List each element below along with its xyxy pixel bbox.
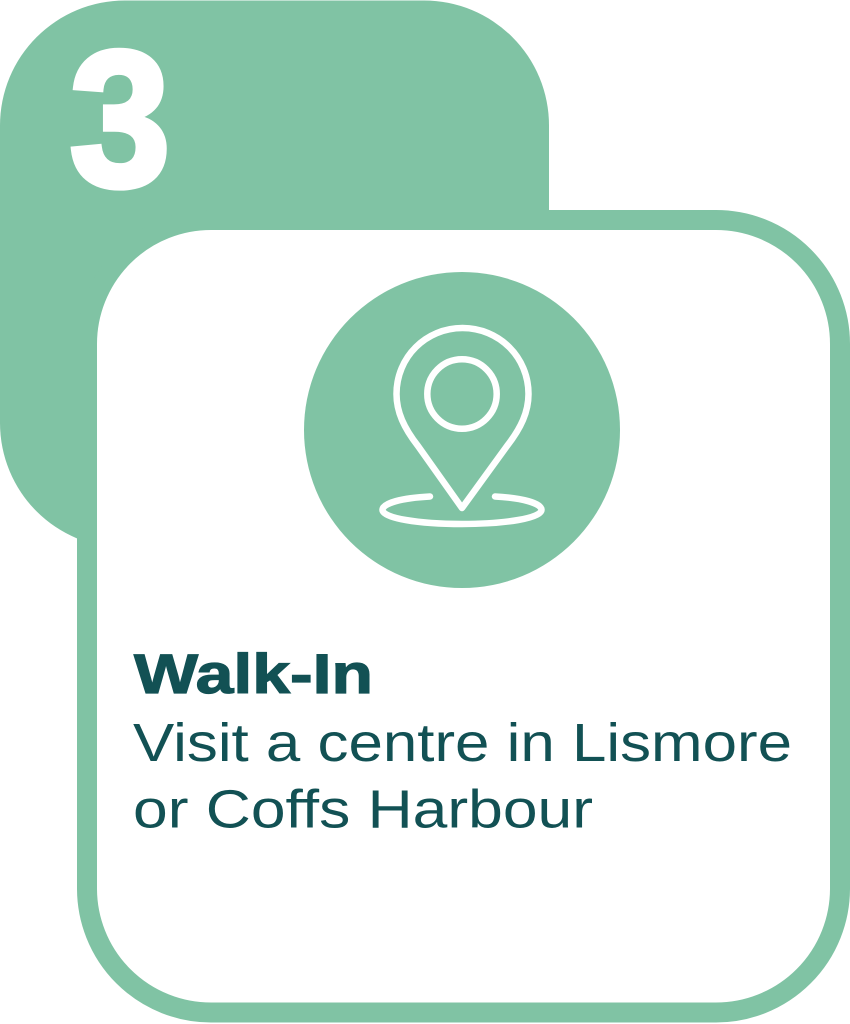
step number 3: 3 bbox=[70, 10, 170, 226]
description line 2: or Coffs Harbour bbox=[133, 780, 593, 840]
icon: map pin outline bbox=[396, 328, 528, 508]
description line 1: Visit a centre in Lismore bbox=[133, 713, 792, 773]
icon: location pin in circle bbox=[304, 272, 620, 588]
icon background circle bbox=[304, 272, 620, 588]
icon: map pin inner ring bbox=[427, 359, 497, 429]
icon: ground ellipse bbox=[382, 496, 542, 524]
heading: Walk-In: Walk-In bbox=[134, 642, 373, 705]
back tab panel bbox=[0, 0, 549, 548]
description text bbox=[133, 713, 792, 840]
main card panel bbox=[87, 220, 840, 1012]
